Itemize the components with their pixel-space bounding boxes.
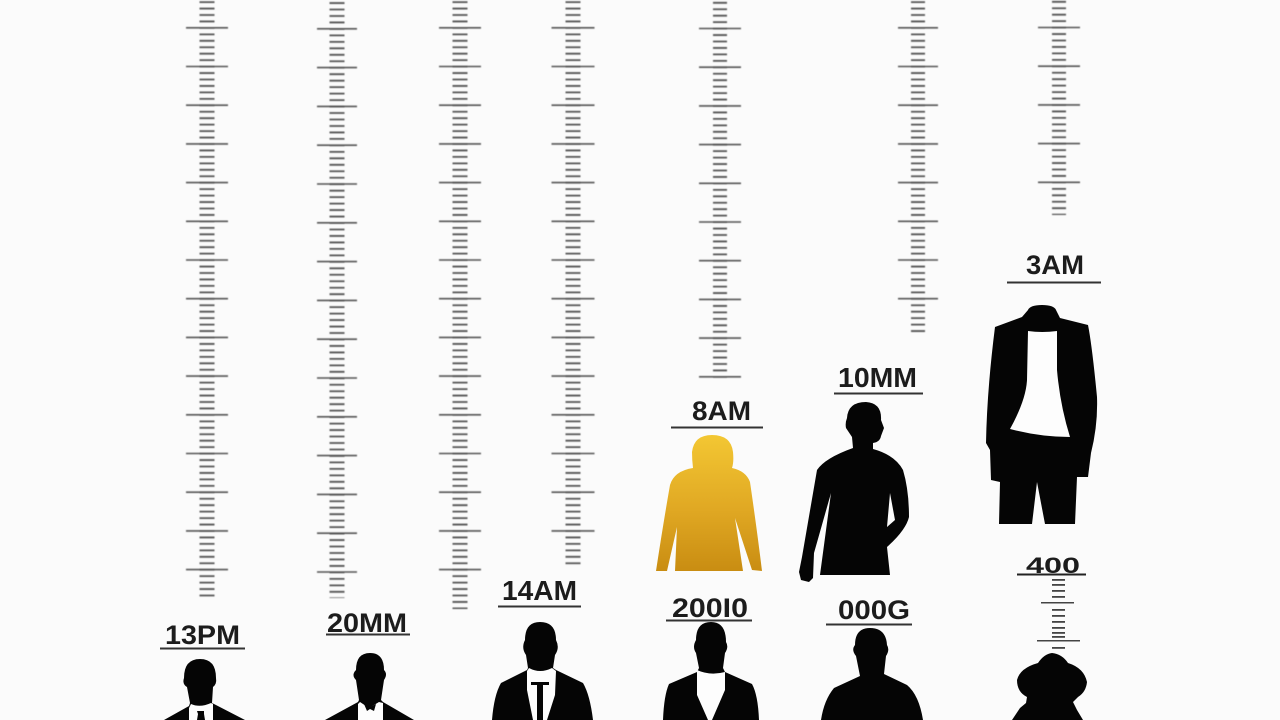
label: 13PM: 13PM: [165, 620, 240, 650]
figure: gold highlighted silhouette: [656, 435, 762, 571]
scale column 3: [452, 0, 468, 609]
scale column 2: [330, 0, 344, 598]
label: 000G: 000G: [838, 595, 910, 625]
figure: man in suit 4: [663, 622, 759, 720]
figure: man in suit 2: [325, 653, 414, 720]
scale column 7: [1052, 0, 1066, 215]
figure: man in suit 3: [492, 622, 593, 720]
label: 20MM: 20MM: [327, 608, 407, 638]
label: 400: [1017, 553, 1086, 578]
label: 8AM: [671, 396, 763, 428]
figure: man in suit 1: [164, 659, 245, 720]
figure: black jacket and trousers: [986, 305, 1097, 524]
label: 200I0: 200I0: [672, 593, 748, 623]
label: 400: 400: [1026, 553, 1080, 578]
scale column 4: [566, 0, 580, 566]
figure: man, plain shoulders: [821, 628, 923, 720]
scale column 6: [911, 0, 925, 334]
label: 8AM: 8AM: [692, 396, 751, 426]
label: 10MM: 10MM: [838, 362, 917, 393]
figure: man in profile: [799, 402, 909, 582]
label: 14AM: 14AM: [502, 575, 577, 606]
scale column 1: [200, 0, 214, 598]
figure: person in hat: [1012, 653, 1087, 720]
scale column 7 lower ticks: [1037, 579, 1080, 649]
label: 3AM: [1007, 250, 1101, 284]
label: 3AM: 3AM: [1026, 250, 1084, 280]
scale column 5: [713, 0, 727, 382]
